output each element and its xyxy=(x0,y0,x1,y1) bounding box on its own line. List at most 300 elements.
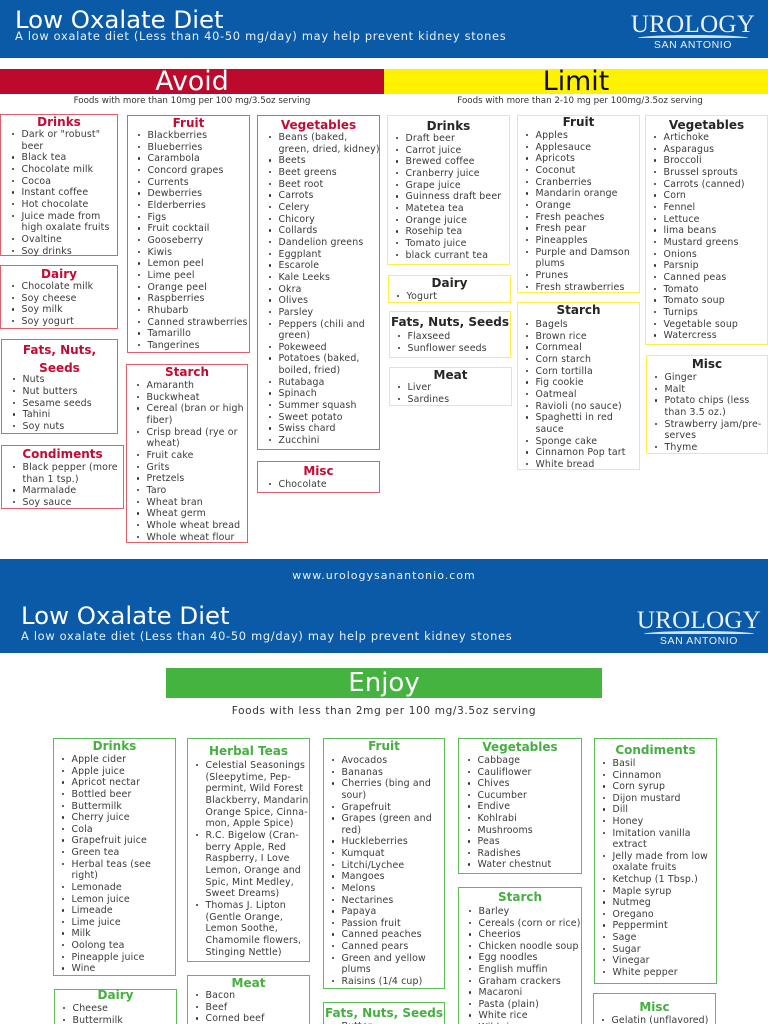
list: enjoy vegetables: Chives xyxy=(478,778,510,789)
second logo: UROLOGY xyxy=(637,607,761,634)
list: avoid vegetables: Celery xyxy=(278,202,310,213)
list: avoid vegetables: green) xyxy=(278,330,310,341)
list: limit vegetables: Watercress xyxy=(664,330,717,341)
panel: limit dairy: Dairy xyxy=(432,276,467,290)
list: enjoy fruit: Grapes (green and xyxy=(342,813,432,824)
list: limit fruit: Pineapples xyxy=(536,235,588,246)
list: enjoy drinks: Green tea xyxy=(72,847,119,858)
list: enjoy fruit: sour) xyxy=(342,790,366,801)
banner: Limit: Limit xyxy=(543,66,609,97)
list: enjoy drinks: Milk xyxy=(72,928,91,939)
list: limit drinks: Carrot juice xyxy=(406,145,461,156)
list: avoid dairy: Soy yogurt xyxy=(22,316,74,327)
list: avoid fruit: Lime peel xyxy=(148,270,195,281)
logo: Urology San Antonio xyxy=(631,11,755,51)
list: enjoy fruit: Cherries (bing and xyxy=(342,778,431,789)
list: enjoy fruit: Huckleberries xyxy=(342,836,408,847)
list: enjoy drinks: Bottled beer xyxy=(72,789,131,800)
panel: avoid vegetables xyxy=(257,115,380,450)
list: limit meat: Sardines xyxy=(408,394,449,405)
list: limit vegetables xyxy=(654,132,745,341)
list: avoid starch: Buckwheat xyxy=(146,392,200,403)
list: enjoy drinks: Apple cider xyxy=(72,754,126,765)
panel: limit drinks: Drinks xyxy=(427,119,470,133)
list: avoid vegetables: Okra xyxy=(278,284,302,295)
list: avoid drinks: high oxalate fruits xyxy=(22,222,110,233)
panel: limit misc xyxy=(646,355,768,454)
banner: Enjoy xyxy=(166,668,602,698)
list: avoid vegetables: Chicory xyxy=(278,214,315,225)
list: avoid vegetables: Rutabaga xyxy=(278,377,325,388)
panel: enjoy dairy: Dairy xyxy=(98,988,133,1002)
panel: limit meat xyxy=(389,367,512,406)
list: enjoy drinks: Limeade xyxy=(72,905,113,916)
banner: Limit xyxy=(384,69,768,94)
list: enjoy condiments: Corn syrup xyxy=(612,781,665,792)
panel: enjoy dairy xyxy=(54,989,177,1024)
panel: enjoy condiments: Condiments xyxy=(615,743,696,757)
list: avoid vegetables xyxy=(269,132,380,446)
list: limit fruit: Fresh strawberries xyxy=(536,282,624,293)
list: limit drinks: Guinness draft beer xyxy=(406,191,501,202)
list: enjoy condiments: oxalate fruits xyxy=(612,862,676,873)
list: avoid fruit: Kiwis xyxy=(148,247,172,258)
list: limit starch: Ravioli (no sauce) xyxy=(536,401,622,412)
panel: limit fats, nuts, seeds: Fats, Nuts, Seeds xyxy=(391,315,509,329)
list: avoid starch: Crisp bread (rye or xyxy=(146,427,238,438)
panel: avoid vegetables: Vegetables xyxy=(281,118,356,132)
list: limit starch: Bagels xyxy=(536,319,568,330)
list: avoid vegetables: Peppers (chili and xyxy=(278,318,365,330)
list: enjoy herbal teas: permint, Wild Forest xyxy=(206,783,303,794)
list: enjoy condiments: Sugar xyxy=(612,944,641,954)
panel: limit starch xyxy=(517,302,640,470)
list: enjoy fruit: Litchi/Lychee xyxy=(342,860,404,871)
list: limit misc: Potato chips (less xyxy=(664,395,749,406)
list: avoid vegetables: boiled, fried) xyxy=(278,365,340,376)
list: limit meat: Liver xyxy=(408,382,431,393)
list: enjoy fruit: Grapefruit xyxy=(342,802,391,812)
list: enjoy condiments: Cinnamon xyxy=(612,770,661,781)
list: enjoy drinks: Cherry juice xyxy=(72,812,130,823)
list: limit fruit: Purple and Damson xyxy=(536,247,630,258)
list: limit fruit: Coconut xyxy=(536,165,575,176)
panel: limit vegetables xyxy=(645,115,768,345)
list: avoid fats: Tahini xyxy=(22,409,50,420)
list: enjoy vegetables: Radishes xyxy=(478,848,521,859)
list: avoid vegetables: Potatoes (baked, xyxy=(278,353,360,364)
list: enjoy herbal teas: Thomas J. Lipton xyxy=(206,900,286,911)
second logo: SAN ANTONIO xyxy=(660,635,738,647)
list: limit vegetables: Onions xyxy=(664,249,697,260)
list: avoid vegetables: Beans (baked, xyxy=(278,132,347,143)
list: enjoy fruit: Papaya xyxy=(342,906,376,917)
list: avoid starch: Whole wheat bread xyxy=(146,520,240,531)
list: enjoy herbal teas: Lemon, Orange and xyxy=(206,865,301,876)
list: avoid vegetables: Escarole xyxy=(278,260,319,271)
list: limit drinks: Rosehip tea xyxy=(406,226,462,237)
list: avoid vegetables: Beet greens xyxy=(278,167,337,178)
list: avoid drinks: Chocolate milk xyxy=(22,164,93,175)
panel: enjoy misc: Misc xyxy=(639,1000,670,1014)
list: avoid fruit: Lemon peel xyxy=(148,258,204,269)
list: limit vegetables: Brussel sprouts xyxy=(664,167,738,178)
list: enjoy drinks xyxy=(62,754,151,974)
list: enjoy fruit xyxy=(332,755,432,987)
panel: avoid condiments: Condiments xyxy=(22,447,103,461)
list: avoid misc: Chocolate xyxy=(278,479,327,490)
logo: Urology San Antonio: UROLOGY xyxy=(631,11,755,38)
list: avoid vegetables: Dandelion greens xyxy=(278,237,363,248)
second subtitle: A low oxalate diet (Less than 40-50 mg/day) may help prevent kidney stones xyxy=(21,629,512,643)
list: limit vegetables: Artichoke xyxy=(664,132,709,143)
list: enjoy fruit: Green and yellow xyxy=(342,953,426,964)
title: Low Oxalate Diet xyxy=(15,5,224,34)
list: avoid dairy: Soy milk xyxy=(22,304,63,315)
list: avoid fruit: Raspberries xyxy=(148,293,205,304)
panel: avoid misc xyxy=(257,461,380,493)
list: enjoy drinks: Lemon juice xyxy=(72,894,130,904)
list: avoid dairy xyxy=(12,281,93,327)
list: avoid drinks: Ovaltine xyxy=(22,234,62,245)
list: limit fats: Flaxseed xyxy=(408,331,450,342)
list: enjoy herbal teas: berry Apple, Red xyxy=(206,842,286,853)
list: enjoy starch: Pasta (plain) xyxy=(478,999,539,1010)
list: limit vegetables: lima beans xyxy=(664,225,716,236)
list: enjoy herbal teas: (Sleepytime, Pep- xyxy=(206,772,291,783)
list: avoid drinks: Dark or "robust" xyxy=(22,129,100,140)
list: avoid fruit: Concord grapes xyxy=(148,165,224,176)
banner: Avoid xyxy=(0,69,384,94)
list: enjoy drinks: Grapefruit juice xyxy=(72,835,147,846)
list: avoid drinks: Instant coffee xyxy=(22,187,88,198)
list: avoid starch: Grits xyxy=(146,462,170,473)
panel: enjoy fruit: Fruit xyxy=(368,739,400,753)
list: enjoy fruit: Nectarines xyxy=(342,894,393,906)
list: avoid fruit: Gooseberry xyxy=(148,235,203,246)
list: avoid fats: Soy nuts xyxy=(22,421,64,432)
list: limit fruit: Prunes xyxy=(536,270,568,281)
list: enjoy herbal teas: Spic, Mint Medley, xyxy=(206,877,294,888)
list: enjoy condiments: Nutmeg xyxy=(612,897,651,908)
list: avoid starch: wheat) xyxy=(146,438,180,449)
list: avoid fruit: Dewberries xyxy=(148,188,202,199)
list: enjoy fruit: Canned pears xyxy=(342,941,408,952)
list: limit misc: Ginger xyxy=(664,372,697,383)
list: limit misc: than 3.5 oz.) xyxy=(664,407,726,418)
list: enjoy herbal teas: Sweet Dreams) xyxy=(206,888,279,899)
panel: enjoy condiments xyxy=(594,738,717,984)
list: avoid vegetables: Zucchini xyxy=(278,435,319,446)
list: avoid vegetables: Sweet potato xyxy=(278,412,343,423)
panel: avoid fats, nuts, seeds: Fats, Nuts, xyxy=(23,343,96,357)
top header band xyxy=(0,0,768,58)
list: avoid condiments: Soy sauce xyxy=(22,497,72,508)
list: limit vegetables: Carrots (canned) xyxy=(664,179,745,190)
list: avoid fruit: Tangerines xyxy=(148,340,200,351)
list: enjoy vegetables: Kohlrabi xyxy=(478,813,517,824)
second title: Low Oxalate Diet xyxy=(21,601,230,630)
panel: avoid condiments xyxy=(1,445,124,509)
panel: avoid drinks: Drinks xyxy=(37,115,81,129)
list: avoid dairy: Soy cheese xyxy=(22,293,76,304)
list: limit misc xyxy=(655,372,761,453)
list: avoid vegetables: Collards xyxy=(278,225,317,236)
list: limit drinks: Draft beer xyxy=(406,133,455,144)
list: avoid starch: Taro xyxy=(146,485,166,496)
panel: limit fats, nuts, seeds xyxy=(389,311,511,358)
list: avoid starch: fiber) xyxy=(146,415,173,426)
list: enjoy condiments: Basil xyxy=(612,758,636,769)
list: enjoy meat: Bacon xyxy=(206,990,235,1001)
list: avoid vegetables: Eggplant xyxy=(278,249,321,260)
list: enjoy starch: Barley xyxy=(478,906,509,917)
list: limit fruit: Applesauce xyxy=(536,142,591,153)
panel: limit drinks xyxy=(387,115,510,265)
list: limit fruit xyxy=(526,130,630,293)
list: limit dairy: Yogurt xyxy=(406,291,437,302)
panel: enjoy fats, nuts, seeds xyxy=(323,1002,445,1024)
list: enjoy condiments: Imitation vanilla xyxy=(612,828,691,839)
list: avoid fruit: Blackberries xyxy=(148,130,207,141)
list: enjoy drinks: Herbal teas (see xyxy=(72,859,151,870)
footer and second header band xyxy=(0,559,768,653)
second logo xyxy=(637,607,761,647)
list: avoid vegetables: Olives xyxy=(278,295,308,306)
list: enjoy starch: Cheerios xyxy=(478,929,521,940)
subtitle: A low oxalate diet (Less than 40-50 mg/day) may help prevent kidney stones xyxy=(15,29,506,43)
list: limit drinks: Cranberry juice xyxy=(406,168,480,179)
list: enjoy vegetables: Cabbage xyxy=(478,755,520,766)
panel: enjoy herbal teas: Herbal Teas xyxy=(209,744,288,758)
list: limit fruit: plums xyxy=(536,258,565,269)
panel: limit starch: Starch xyxy=(556,303,601,317)
list: limit misc: Thyme xyxy=(664,442,697,453)
list: avoid condiments: than 1 tsp.) xyxy=(22,474,79,485)
list: enjoy fruit: Passion fruit xyxy=(342,918,401,929)
list: enjoy condiments: Ketchup (1 Tbsp.) xyxy=(612,874,698,885)
list: enjoy fruit: Bananas xyxy=(342,767,383,778)
list: avoid fruit: Elderberries xyxy=(148,200,206,211)
list: enjoy drinks: Oolong tea xyxy=(72,940,125,951)
panel: avoid starch: Starch xyxy=(165,365,209,379)
panel: enjoy fats, nuts, seeds: Fats, Nuts, Seeds xyxy=(325,1006,443,1020)
list: avoid drinks: Black tea xyxy=(22,152,66,163)
list: enjoy starch: Egg noodles xyxy=(478,952,538,963)
list: limit vegetables: Tomato soup xyxy=(664,295,725,306)
list: enjoy drinks: Wine xyxy=(72,963,95,974)
list: avoid vegetables: Swiss chard xyxy=(278,423,336,434)
list: enjoy fruit: Raisins (1/4 cup) xyxy=(342,976,422,987)
list: limit drinks: black currant tea xyxy=(406,250,488,261)
panel: avoid fats, nuts, seeds: Seeds xyxy=(39,361,80,375)
panel: enjoy meat xyxy=(187,975,310,1024)
list: enjoy drinks: Buttermilk xyxy=(72,800,122,812)
list: limit starch: sauce xyxy=(536,424,564,435)
panel: enjoy misc xyxy=(593,993,716,1024)
list: avoid vegetables: green, dried, kidney) xyxy=(278,144,380,155)
list: enjoy starch xyxy=(469,906,581,1024)
list: avoid fats: Nut butters xyxy=(22,386,78,397)
list: avoid starch xyxy=(137,380,244,543)
list: avoid fats: Nuts xyxy=(22,374,45,385)
list: limit vegetables: Corn xyxy=(664,190,686,201)
list: limit vegetables: Lettuce xyxy=(664,214,700,225)
list: enjoy herbal teas: mon, Apple Spice) xyxy=(206,818,294,829)
list: avoid drinks xyxy=(12,129,110,257)
panel: limit meat: Meat xyxy=(434,368,467,382)
list: avoid starch: Wheat bran xyxy=(146,497,203,508)
list: enjoy fruit: Kumquat xyxy=(342,848,385,859)
list: avoid fruit: Fruit cocktail xyxy=(148,223,209,234)
list: avoid vegetables: Parsley xyxy=(278,307,313,318)
list: enjoy condiments: White pepper xyxy=(612,967,678,978)
panel: avoid fruit xyxy=(127,115,250,353)
list: enjoy condiments: Sage xyxy=(612,932,637,943)
Enjoy description: Foods with less than 2mg per 100 mg/3.5oz serving xyxy=(232,705,536,717)
list: enjoy drinks: Pineapple juice xyxy=(72,952,145,963)
list: enjoy condiments: Honey xyxy=(612,816,643,827)
list: limit vegetables: Canned peas xyxy=(664,272,726,283)
panel: avoid fats, nuts, seeds xyxy=(1,339,118,434)
list: avoid condiments: Marmalade xyxy=(22,485,76,496)
list: enjoy vegetables: Endive xyxy=(478,801,510,812)
list: enjoy condiments: Jelly made from low xyxy=(612,851,708,862)
panel: limit fruit xyxy=(517,115,640,293)
list: limit starch: Corn tortilla xyxy=(536,366,593,377)
list: enjoy drinks: Cola xyxy=(72,824,93,835)
list: avoid starch: Fruit cake xyxy=(146,450,194,461)
panel: limit vegetables: Vegetables xyxy=(669,118,744,132)
list: enjoy dairy: Cheese xyxy=(72,1003,108,1014)
list: enjoy herbal teas: (Gentle Orange, xyxy=(206,912,283,923)
list: enjoy dairy xyxy=(63,1003,123,1024)
website url: www.urologysanantonio.com xyxy=(292,569,476,582)
list: limit misc: Malt xyxy=(664,384,685,395)
list: limit fruit: Mandarin orange xyxy=(536,188,618,199)
list: avoid fruit: Currents xyxy=(148,177,189,188)
panel: enjoy drinks xyxy=(53,738,176,976)
list: enjoy vegetables: Peas xyxy=(478,836,500,847)
panel: limit dairy xyxy=(388,275,511,303)
list: limit meat xyxy=(398,382,449,405)
list: avoid fats xyxy=(13,374,92,432)
list: avoid vegetables: Spinach xyxy=(278,388,317,399)
list: limit misc: Strawberry jam/pre- xyxy=(664,419,761,430)
list: enjoy drinks: Apricot nectar xyxy=(72,777,140,788)
list: limit fruit: Apricots xyxy=(536,153,575,164)
list: avoid starch: Wheat germ xyxy=(146,508,206,519)
Limit description: Foods with more than 2-10 mg per 100mg/3.5oz serving xyxy=(457,96,703,106)
panel: enjoy drinks: Drinks xyxy=(93,739,136,753)
list: limit starch: White bread xyxy=(536,459,594,470)
list: limit fruit: Fresh pear xyxy=(536,223,586,234)
list: enjoy vegetables: Cucumber xyxy=(478,790,527,801)
list: enjoy condiments: Dill xyxy=(612,804,628,815)
list: limit drinks xyxy=(396,133,502,261)
list: limit starch: Fig cookie xyxy=(536,377,584,388)
list: enjoy condiments: Maple syrup xyxy=(612,886,671,897)
list: limit vegetables: Parsnip xyxy=(664,260,699,271)
list: avoid dairy: Chocolate milk xyxy=(22,281,93,292)
list: limit fruit: Fresh peaches xyxy=(536,212,605,223)
list: avoid fruit: Rhubarb xyxy=(148,305,188,316)
list: enjoy herbal teas: R.C. Bigelow (Cran- xyxy=(206,830,299,841)
list: enjoy vegetables: Water chestnut xyxy=(478,859,551,870)
panel: enjoy herbal teas xyxy=(187,738,310,962)
list: enjoy vegetables: Cauliflower xyxy=(478,767,532,778)
list: limit drinks: Tomato juice xyxy=(406,238,467,249)
list: avoid drinks: beer xyxy=(22,141,43,152)
panel: enjoy vegetables: Vegetables xyxy=(482,740,558,754)
list: avoid fruit: Blueberries xyxy=(148,142,202,153)
list: avoid drinks: Cocoa xyxy=(22,176,51,187)
list: limit vegetables: Tomato xyxy=(664,284,699,295)
list: avoid drinks: Juice made from xyxy=(22,211,100,222)
panel: enjoy starch xyxy=(458,887,582,1024)
list: limit fruit: Apples xyxy=(536,130,568,141)
list: limit fruit: Cranberries xyxy=(536,177,592,188)
list: limit starch: Spaghetti in red xyxy=(536,412,613,423)
panel: avoid misc: Misc xyxy=(303,464,334,478)
list: enjoy herbal teas: Orange Spice, Cinna- xyxy=(206,807,308,818)
list: enjoy fruit: Mangoes xyxy=(342,871,385,882)
list: enjoy meat: Beef xyxy=(206,1002,227,1013)
panel: enjoy meat: Meat xyxy=(232,976,265,990)
list: enjoy condiments xyxy=(603,758,708,978)
list: enjoy herbal teas: Chamomile flowers, xyxy=(206,935,301,946)
list: enjoy drinks: Apple juice xyxy=(72,766,125,777)
list: enjoy starch: White rice xyxy=(478,1010,528,1021)
panel: avoid starch xyxy=(126,364,248,543)
list: enjoy condiments: extract xyxy=(612,839,647,850)
list: enjoy starch: Chicken noodle soup xyxy=(478,941,579,952)
list: enjoy condiments: Oregano xyxy=(612,909,654,920)
list: enjoy fruit: Avocados xyxy=(342,755,387,766)
panel: limit misc: Misc xyxy=(692,357,722,371)
panel: enjoy vegetables xyxy=(458,738,582,874)
list: limit vegetables: Vegetable soup xyxy=(664,318,738,330)
list: limit starch: Cinnamon Pop tart xyxy=(536,447,626,458)
list: enjoy meat: Corned beef xyxy=(206,1013,265,1024)
Avoid description: Foods with more than 10mg per 100 mg/3.5oz serving xyxy=(74,96,310,106)
list: limit drinks: Brewed coffee xyxy=(406,156,475,167)
list: avoid starch: Amaranth xyxy=(146,380,194,391)
list: enjoy herbal teas: Lemon Soothe, xyxy=(206,923,278,934)
list: enjoy vegetables xyxy=(468,755,551,870)
list: limit vegetables: Turnips xyxy=(664,307,698,318)
list: limit fats xyxy=(398,331,487,354)
list: avoid vegetables: Pokeweed xyxy=(278,342,327,353)
panel: enjoy fruit xyxy=(323,738,445,989)
panel: avoid dairy: Dairy xyxy=(41,267,77,281)
panel: avoid dairy xyxy=(0,265,118,329)
list: limit vegetables: Mustard greens xyxy=(664,237,739,248)
panel: limit fruit: Fruit xyxy=(563,115,594,129)
list: enjoy herbal teas: Raspberry, I Love xyxy=(206,853,290,864)
list: limit vegetables: Fennel xyxy=(664,202,695,213)
list: enjoy vegetables: Mushrooms xyxy=(478,825,533,836)
panel: avoid drinks xyxy=(0,114,118,256)
banner: Enjoy: Enjoy xyxy=(348,668,420,698)
list: limit fruit: Orange xyxy=(536,200,571,211)
list: enjoy fruit: red) xyxy=(342,825,361,836)
list: avoid starch: Whole wheat flour xyxy=(146,532,235,543)
list: enjoy condiments: Dijon mustard xyxy=(612,793,681,804)
list: enjoy starch: English muffin xyxy=(478,964,548,975)
panel: avoid fruit: Fruit xyxy=(173,116,204,130)
list: limit starch: Oatmeal xyxy=(536,389,577,400)
